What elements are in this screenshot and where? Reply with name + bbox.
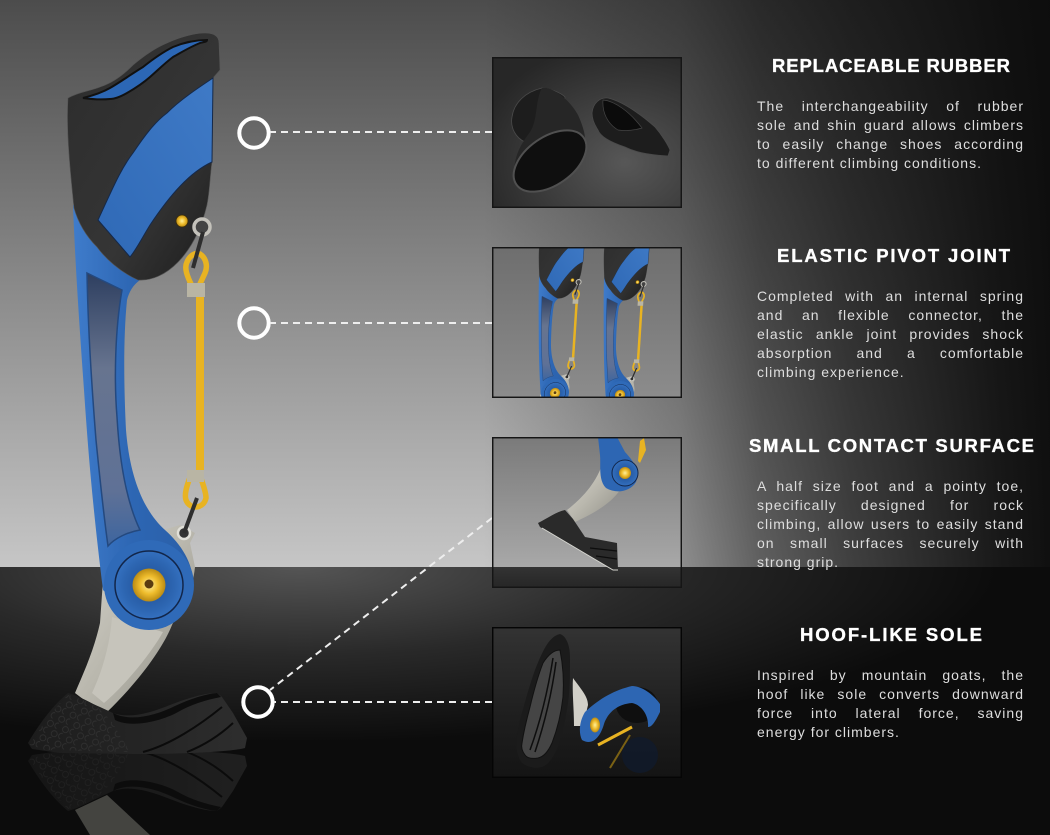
connector: replaceable rubber [239, 118, 492, 148]
panel: replaceable rubber photo [492, 57, 682, 208]
text block: small contact surface: strong grip. [757, 554, 839, 570]
rubber hoof sole [28, 693, 247, 754]
heading: replaceable rubber: REPLACEABLE RUBBER [772, 55, 1010, 76]
text block: hoof-like sole [757, 667, 1024, 740]
connector: contact surface and hoof sole [243, 518, 492, 717]
heading: hoof-like sole: HOOF-LIKE SOLE [800, 624, 982, 645]
prosthetic leg [67, 33, 220, 712]
text block: elastic pivot joint: climbing experience. [757, 364, 905, 380]
panel: small contact surface photo [492, 437, 682, 588]
text block: replaceable rubber [757, 98, 1024, 171]
text block: small contact surface: A half size foot and a pointy toe, [757, 478, 1024, 494]
text block: elastic pivot joint: and an flexible connector, the [757, 307, 1024, 323]
text block: hoof-like sole: hoof like sole converts downward [757, 686, 1024, 702]
text block: elastic pivot joint: absorption and a comfortable [757, 345, 1024, 361]
foot reflection [28, 750, 247, 835]
text block: hoof-like sole: Inspired by mountain goats, the [757, 667, 1024, 683]
panel: elastic pivot joint photo [492, 247, 682, 398]
heading: elastic pivot joint: ELASTIC PIVOT JOINT [777, 245, 1011, 266]
text block: replaceable rubber: to different climbing conditions. [757, 155, 982, 171]
text block: small contact surface: specifically designed for rock [757, 497, 1024, 513]
text block: elastic pivot joint: elastic ankle joint provides shock [757, 326, 1024, 342]
text block: elastic pivot joint: Completed with an internal spring [757, 288, 1024, 304]
text block: replaceable rubber: to easily change shoes according [757, 136, 1024, 152]
panel: hoof-like sole photo [492, 627, 682, 776]
text block: small contact surface: climbing, allow users to easily stand [757, 516, 1024, 532]
text block: replaceable rubber: sole and shin guard allows climbers [757, 117, 1024, 133]
text block: replaceable rubber: The interchangeability of rubber [757, 98, 1024, 114]
text block: elastic pivot joint [757, 288, 1024, 380]
text block: hoof-like sole: force into lateral force, saving [757, 705, 1024, 721]
connector: elastic pivot joint [239, 308, 492, 338]
text block: small contact surface: on small surfaces securely with [757, 535, 1024, 551]
text block: small contact surface [757, 478, 1024, 570]
text block: hoof-like sole: energy for climbers. [757, 724, 900, 740]
heading: small contact surface: SMALL CONTACT SURFACE [749, 435, 1034, 456]
